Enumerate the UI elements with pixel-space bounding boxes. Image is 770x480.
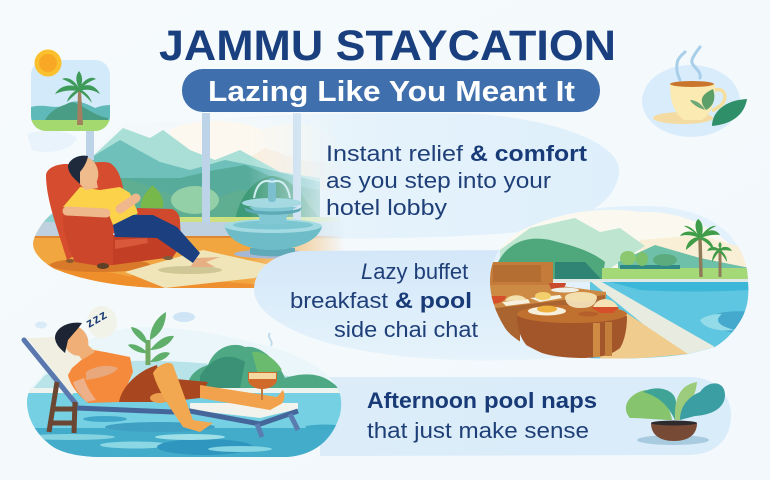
icon: fountain — [224, 178, 322, 258]
panel: afternoon pool naps text bubble — [320, 377, 731, 456]
icon: palm tree and sun — [27, 50, 110, 152]
text: lazy buffet breakfast and pool side chai chat: & pool — [395, 288, 472, 313]
clouds — [35, 322, 47, 328]
text: instant relief and comfort: as you step into your — [326, 168, 551, 193]
illustration: man napping on pool lounger — [20, 312, 350, 463]
text: afternoon pool naps: pool naps — [484, 388, 597, 413]
text: afternoon pool naps: that just make sense — [367, 418, 589, 443]
icon: sleeping zzz bubble — [83, 306, 117, 338]
panel: instant relief text bubble — [190, 113, 619, 239]
icon: man relaxing in red armchair — [46, 155, 220, 269]
icon: potted plant — [626, 382, 725, 445]
text: afternoon pool naps — [367, 388, 597, 443]
text: instant relief and comfort: Instant relief — [326, 141, 464, 166]
illustration: poolside buffet scene — [490, 206, 748, 358]
window pillars — [86, 113, 301, 223]
panel: lazy buffet text bubble — [254, 250, 560, 360]
text: instant relief and comfort: hotel lobby — [326, 195, 447, 220]
subtitle pill: Lazing Like You Meant It — [208, 76, 575, 108]
icon: tea cup — [642, 47, 747, 137]
text: lazy buffet breakfast and pool side chai chat — [290, 259, 478, 342]
subtitle pill — [182, 69, 600, 112]
text: lazy buffet breakfast and pool side chai chat: side chai chat — [334, 317, 478, 342]
text: lazy buffet breakfast and pool side chai chat: breakfast — [290, 288, 388, 313]
text: instant relief and comfort: & comfort — [470, 141, 588, 166]
title: JAMMU STAYCATION — [159, 22, 616, 70]
text: afternoon pool naps: Afternoon — [367, 388, 477, 413]
rug — [125, 250, 270, 288]
text: lazy buffet breakfast and pool side chai chat: Lazy buffet — [361, 259, 468, 284]
illustration: lobby scene with man in armchair and fountain — [33, 113, 341, 288]
icon: sleeping zzz bubble: zzz — [83, 306, 110, 331]
text: instant relief and comfort — [326, 141, 588, 220]
